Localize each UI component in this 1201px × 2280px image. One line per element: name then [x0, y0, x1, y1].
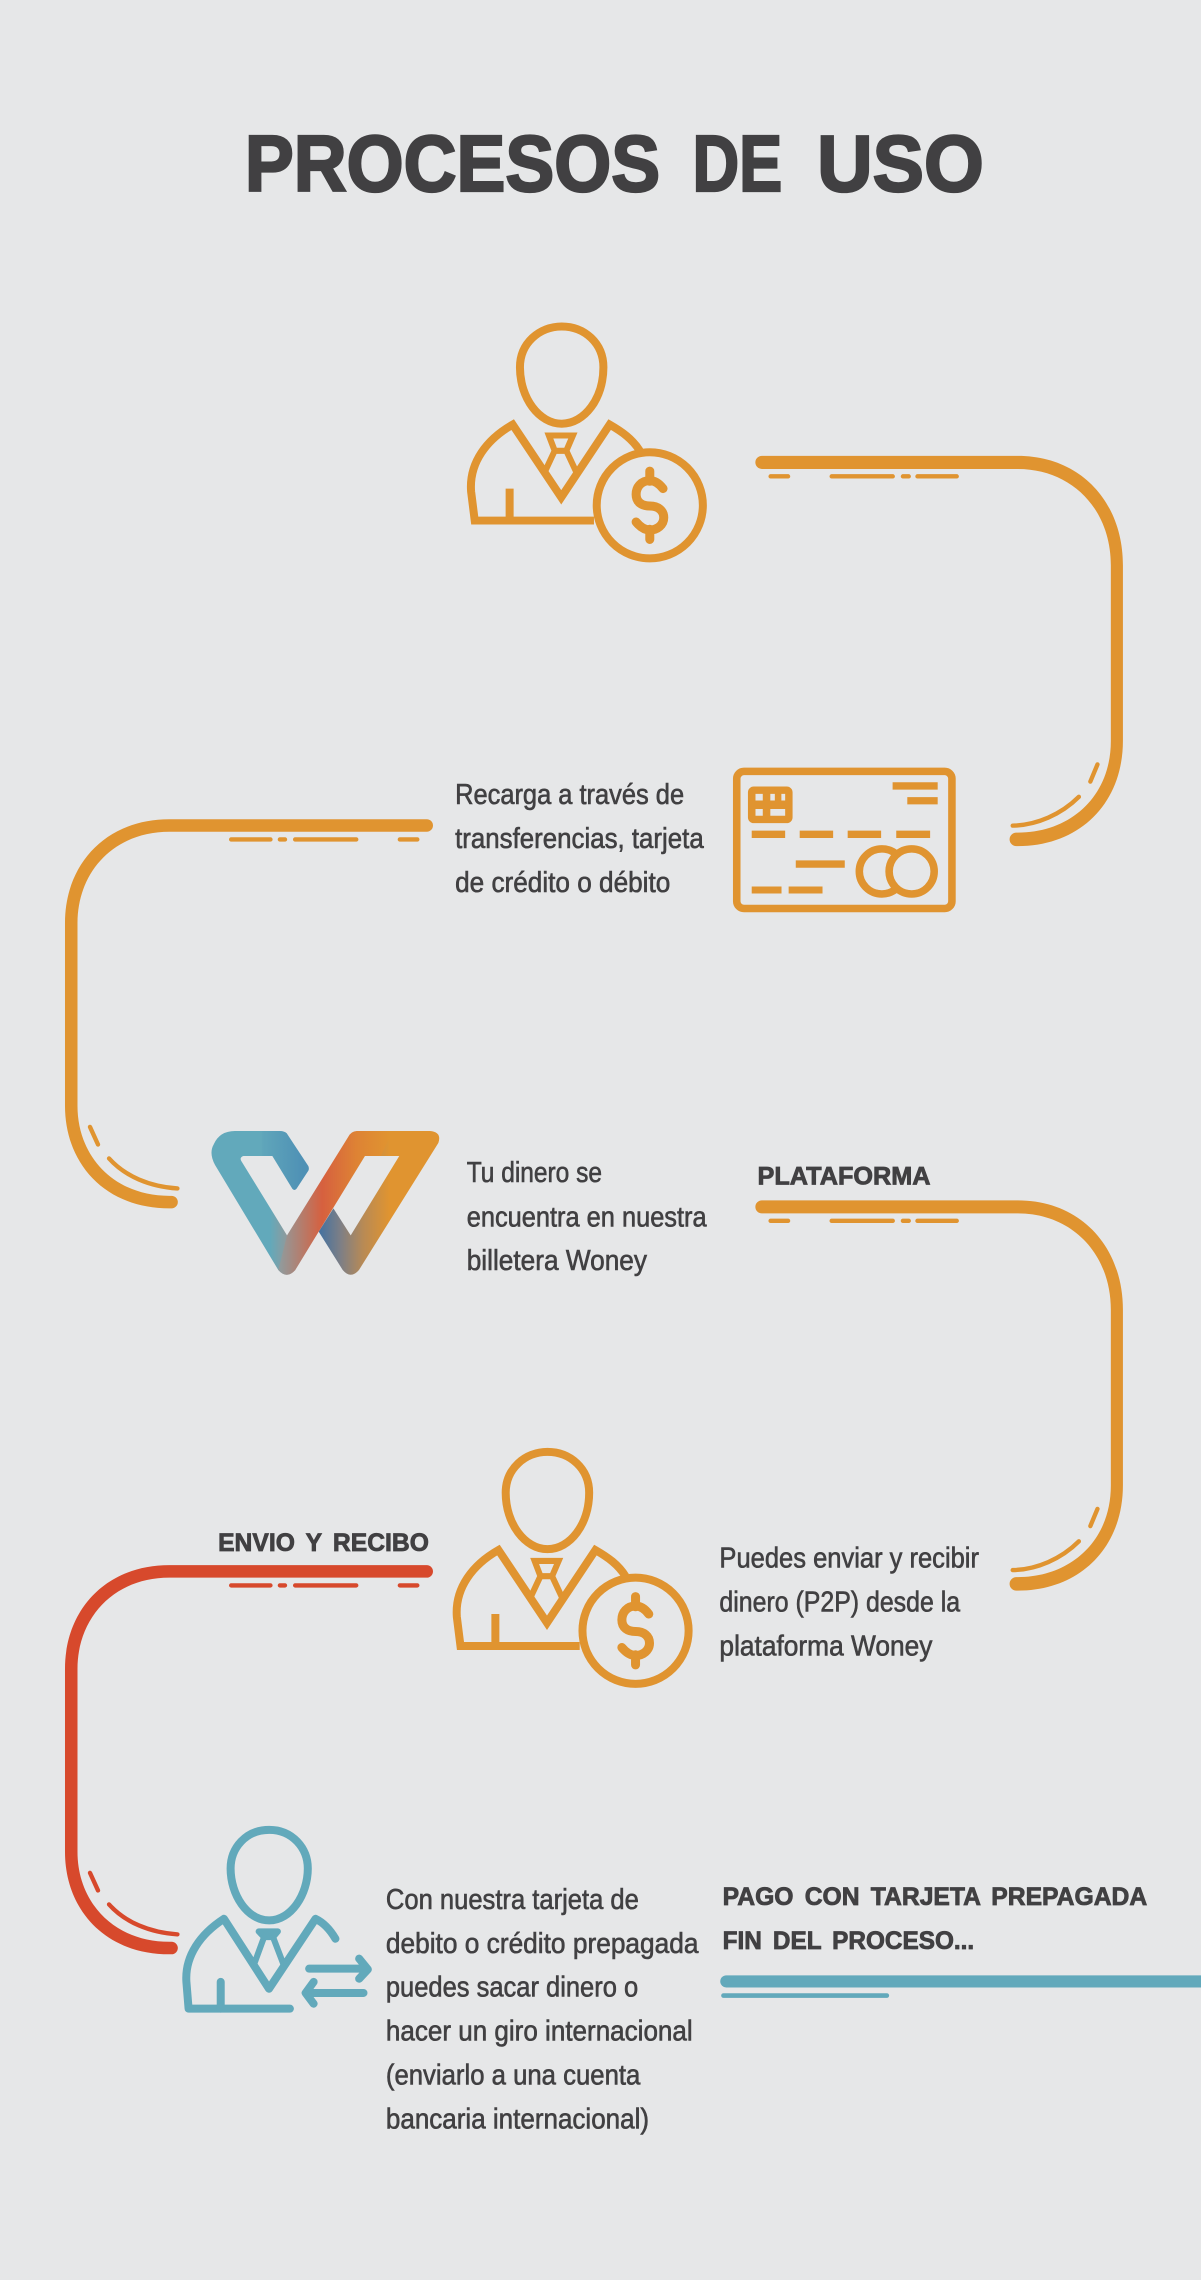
- text: con nuestra tarjeta: Con nuestra tarjeta de: [386, 1884, 639, 1916]
- text: con nuestra tarjeta: (enviarlo a una cuenta: [386, 2060, 641, 2092]
- icon: credit card: [737, 771, 952, 909]
- icon: person with dollar coin 2: [457, 1452, 689, 1684]
- text: puedes enviar: dinero (P2P) desde la: [719, 1587, 960, 1619]
- title: [245, 119, 984, 208]
- heading: pago con tarjeta prepagada: PAGO CON TARJETA PREPAGADA: [723, 1884, 1147, 1911]
- text: tu dinero: [467, 1157, 707, 1277]
- text: puedes enviar: plataforma Woney: [719, 1631, 933, 1663]
- connector: orange path 2: [65, 819, 433, 1208]
- end bar: teal: [720, 1975, 1201, 1998]
- icon: person with dollar coin: [471, 326, 703, 558]
- text: recarga: [455, 779, 704, 899]
- text: con nuestra tarjeta: bancaria internacional): [386, 2103, 649, 2135]
- heading: envio y recibo: ENVIO Y RECIBO: [218, 1530, 429, 1557]
- text: recarga: transferencias, tarjeta: [455, 823, 704, 855]
- connector: orange path 1: [755, 456, 1123, 846]
- heading: plataforma: PLATAFORMA: [758, 1163, 931, 1190]
- icon: person with transfer arrows: [186, 1830, 368, 2009]
- heading: pago con tarjeta prepagada: FIN DEL PROCESO...: [723, 1928, 974, 1955]
- title: USO: [817, 119, 984, 208]
- text: recarga: Recarga a través de: [455, 779, 684, 811]
- text: puedes enviar: Puedes enviar y recibir: [719, 1542, 979, 1575]
- text: tu dinero: encuentra en nuestra: [467, 1201, 707, 1233]
- icon: Woney W logo: [211, 1131, 439, 1275]
- text: con nuestra tarjeta: puedes sacar dinero o: [386, 1971, 638, 2003]
- text: tu dinero: Tu dinero se: [467, 1157, 602, 1189]
- text: recarga: de crédito o débito: [455, 867, 670, 899]
- text: con nuestra tarjeta: hacer un giro internacional: [386, 2015, 693, 2047]
- heading: pago con tarjeta prepagada: [723, 1884, 1147, 1955]
- connector: orange path 3: [755, 1200, 1123, 1591]
- connector: red path: [65, 1565, 433, 1954]
- text: tu dinero: billetera Woney: [467, 1245, 648, 1277]
- text: puedes enviar: [719, 1542, 979, 1663]
- text: con nuestra tarjeta: debito o crédito prepagada: [386, 1928, 699, 1960]
- title: PROCESOS: [245, 119, 660, 208]
- title: DE: [693, 119, 782, 208]
- text: con nuestra tarjeta: [386, 1884, 699, 2135]
